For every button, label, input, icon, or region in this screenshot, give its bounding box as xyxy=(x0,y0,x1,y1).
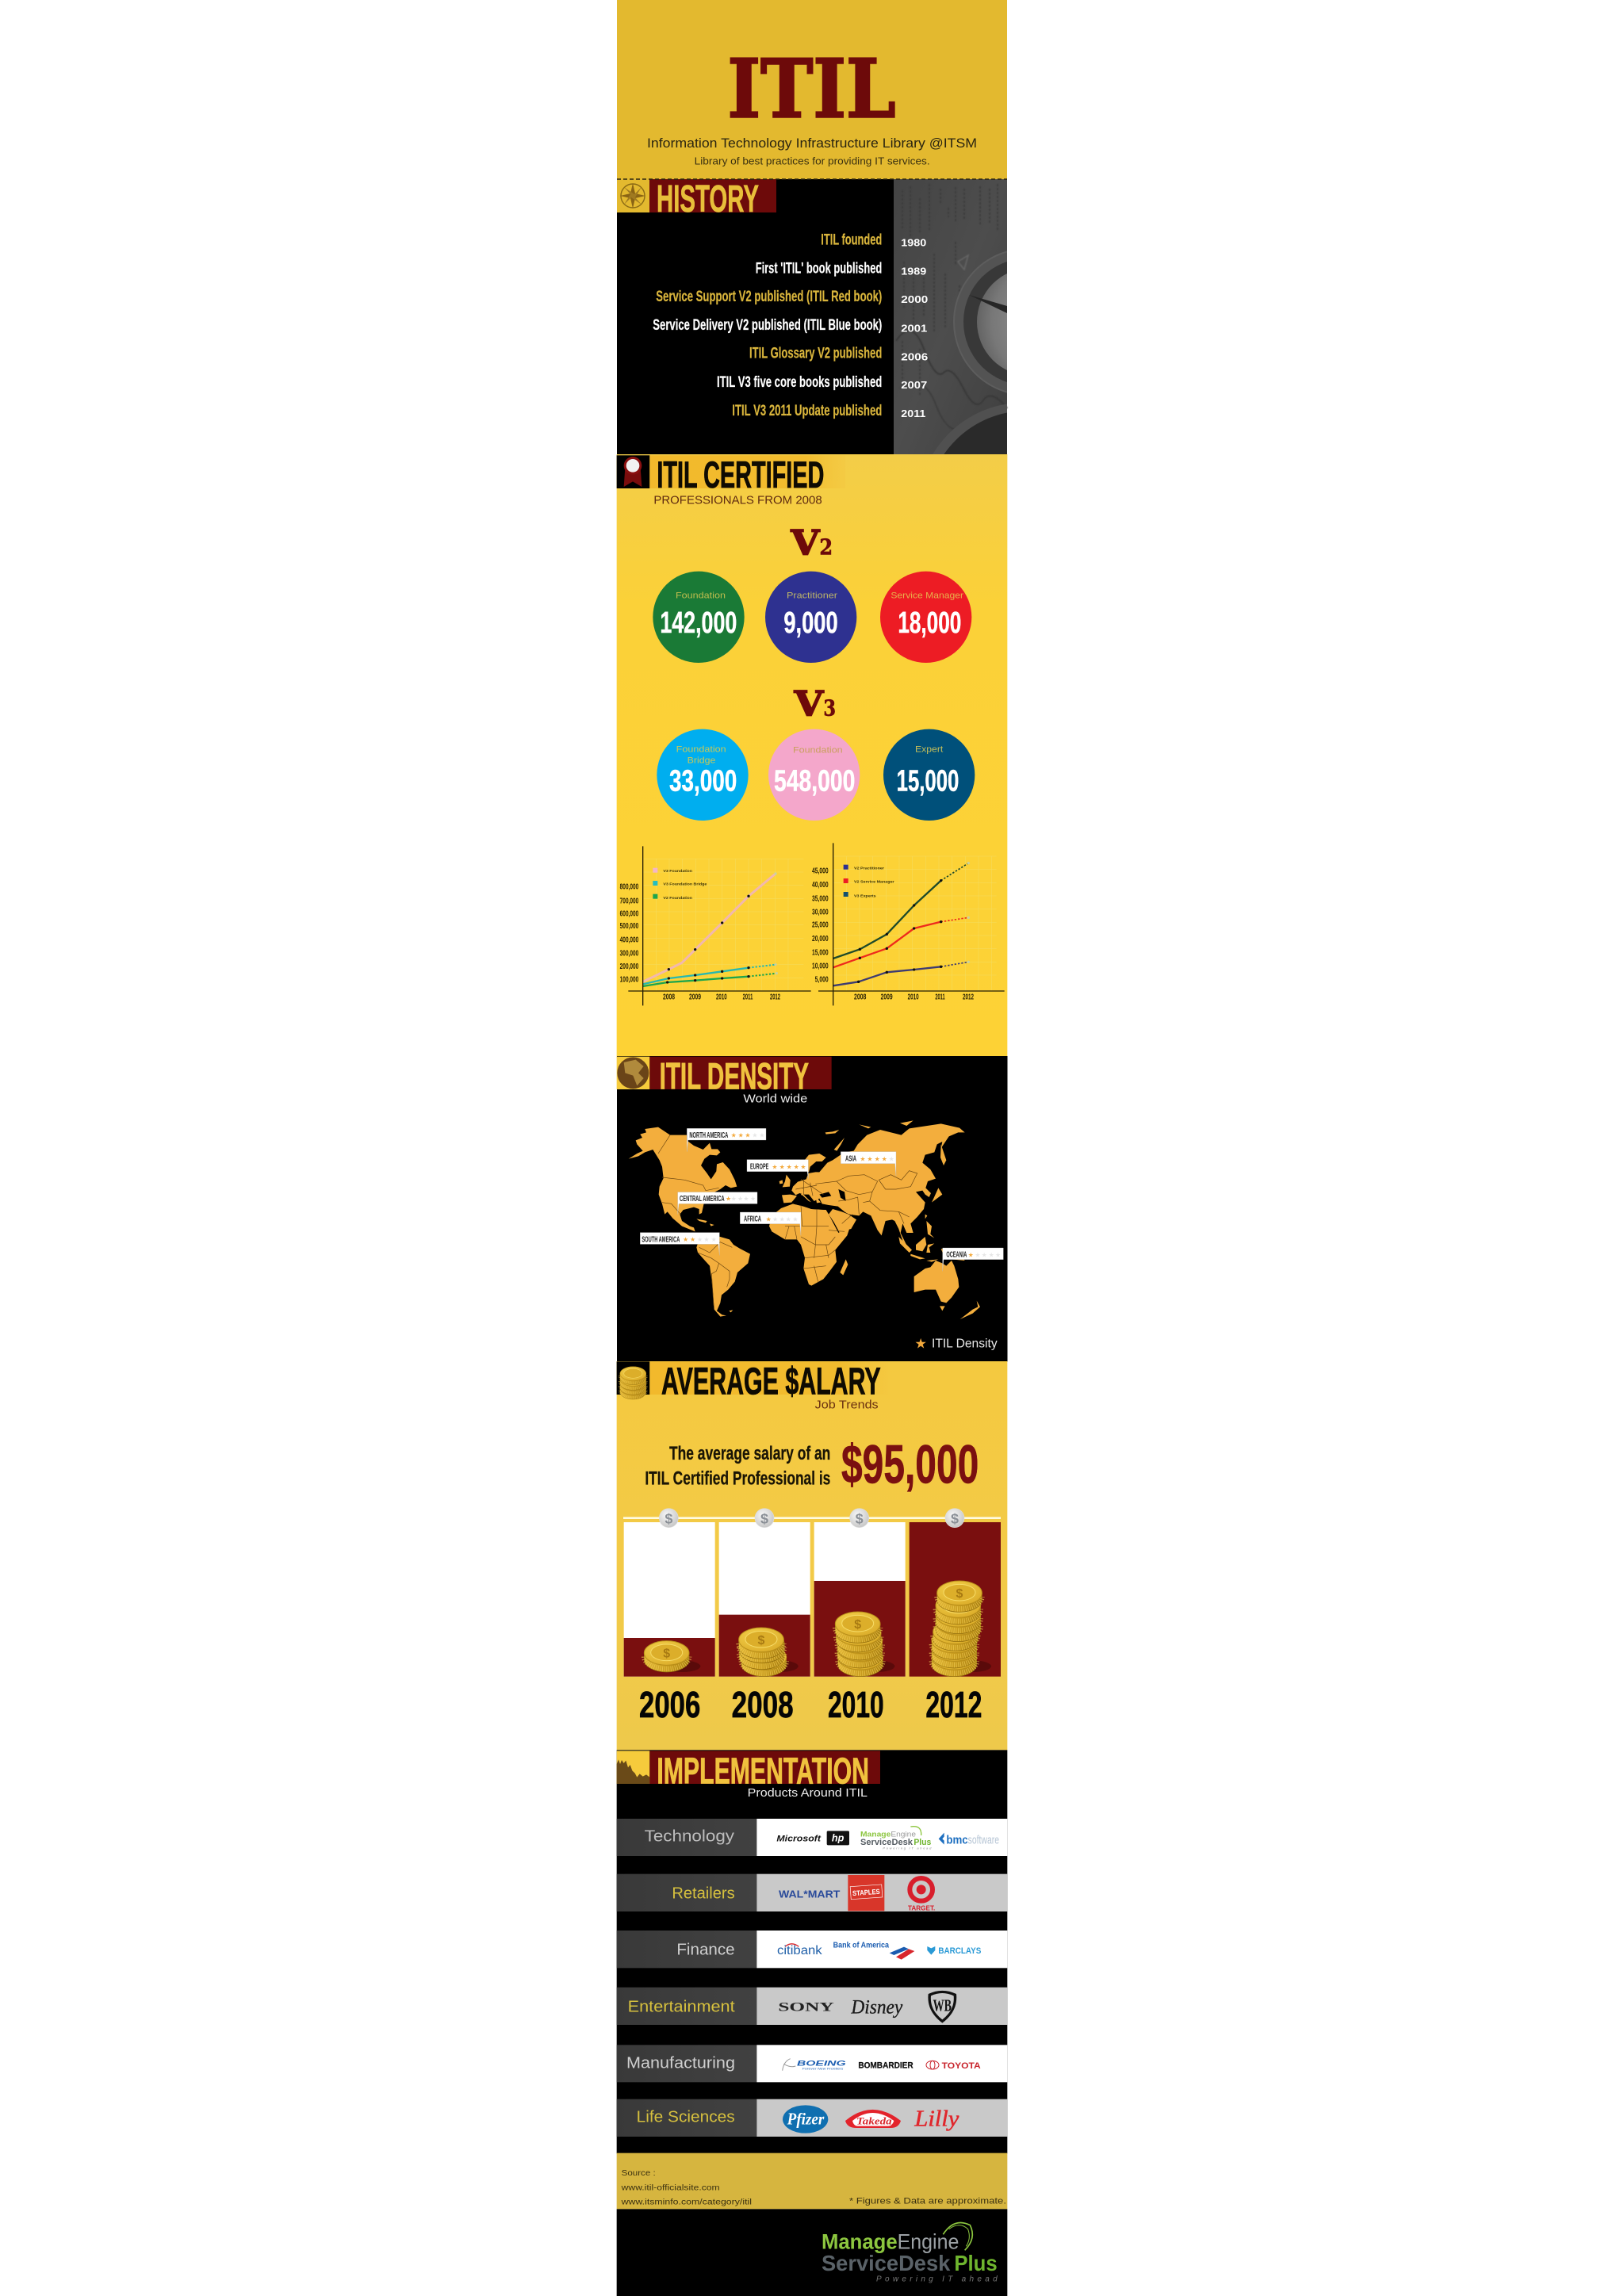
logo: Takeda xyxy=(845,2110,901,2128)
timeline events: Service Delivery V2 published (ITIL Blue book) xyxy=(653,316,882,334)
stat: V3 Foundation Bridge: Foundation xyxy=(676,745,726,755)
left chart y labels: 100,000 xyxy=(620,976,639,985)
row: Entertainment xyxy=(617,1988,1007,2025)
silver coin markers: $ xyxy=(760,1510,768,1526)
left chart y labels: 200,000 xyxy=(620,962,639,971)
logo: Boeing: Forever New Frontiers xyxy=(802,2067,843,2071)
section heading: salary xyxy=(649,1360,888,1402)
logo: BMC Software xyxy=(939,1833,999,1846)
logo: Pfizer: Pfizer xyxy=(787,2110,825,2128)
lower implementation rows xyxy=(617,2045,1007,2296)
salary statement xyxy=(645,1443,830,1490)
panel: average salary xyxy=(617,1360,1007,1750)
panel: ITIL certified xyxy=(617,453,1007,1058)
left chart y labels xyxy=(620,883,639,985)
row: Technology: Technology xyxy=(645,1827,735,1846)
callout: Oceania: OCEANIA xyxy=(946,1251,967,1260)
section heading: density xyxy=(649,1054,832,1096)
bar top rail xyxy=(623,1515,1001,1521)
right chart y labels: 45,000 xyxy=(812,867,829,876)
right chart x labels: 2011 xyxy=(935,993,945,1001)
callout: Asia: ★ xyxy=(875,1155,880,1162)
right chart y labels xyxy=(812,867,829,984)
row: Manufacturing xyxy=(617,2045,1007,2082)
callout: Africa: ★ xyxy=(766,1215,772,1223)
left chart x labels: 2010 xyxy=(716,993,727,1001)
V3 heading xyxy=(794,685,836,725)
timeline years xyxy=(901,236,928,419)
timeline events: ITIL V3 five core books published xyxy=(717,373,882,391)
row: Technology xyxy=(617,1819,1007,1856)
subheading: Job Trends xyxy=(815,1399,879,1412)
callout: Africa: ★ xyxy=(786,1215,791,1223)
right chart legend xyxy=(844,865,894,897)
callout: North America: NORTH AMERICA xyxy=(689,1131,728,1140)
ManageEngine ServiceDesk Plus logo: Manage xyxy=(822,2230,898,2254)
callout: Africa: ★ xyxy=(772,1215,778,1223)
ManageEngine ServiceDesk Plus logo xyxy=(822,2223,998,2283)
logo: Pfizer xyxy=(783,2105,828,2133)
row: Finance xyxy=(617,1931,1007,1968)
logo: Target xyxy=(908,1878,935,1911)
callout: Central America: ★ xyxy=(726,1196,731,1203)
left chart x labels: 2012 xyxy=(770,993,780,1001)
section heading: certified: ITIL CERTIFIED xyxy=(657,453,824,496)
section icon: ribbon xyxy=(617,455,649,488)
section heading: certified xyxy=(649,453,845,496)
callout: Central America: ★ xyxy=(737,1196,743,1203)
row: Retailers xyxy=(617,1874,1007,1911)
bar: 2010 xyxy=(814,1522,906,1677)
logo: Warner Bros xyxy=(928,1991,956,2023)
right chart y labels: 15,000 xyxy=(812,948,829,957)
right chart legend: V2 Practitioner xyxy=(854,867,884,871)
logo: Target: TARGET. xyxy=(908,1904,935,1911)
header panel xyxy=(617,0,1007,179)
callout: North America: ★ xyxy=(752,1132,758,1139)
left chart y labels: 500,000 xyxy=(620,922,639,931)
row: Manufacturing: Manufacturing xyxy=(626,2053,735,2072)
callout: Europe: ★ xyxy=(794,1163,799,1170)
left chart x labels: 2008 xyxy=(663,993,675,1001)
logo: Bank of America: Bank of America xyxy=(833,1942,889,1950)
stat: V3 Foundation: Foundation xyxy=(793,745,843,755)
callout: South America: ★ xyxy=(703,1236,710,1243)
line chart: foundation certifications xyxy=(620,846,811,1005)
callout: Central America: CENTRAL AMERICA xyxy=(680,1195,725,1203)
right chart axes xyxy=(818,843,1005,1005)
year labels: 2012 xyxy=(925,1684,982,1725)
right chart legend: V2 Service Manager xyxy=(854,880,894,884)
callout: Asia: ★ xyxy=(882,1155,887,1162)
timeline years: 1980 xyxy=(901,236,926,249)
logo: Walmart: WAL*MART xyxy=(779,1888,840,1900)
left chart y labels: 400,000 xyxy=(620,936,639,944)
left chart y labels: 300,000 xyxy=(620,949,639,958)
stat: V2 Service Manager xyxy=(880,572,971,663)
callout: Europe: ★ xyxy=(779,1163,785,1170)
bar: 2010: $ xyxy=(854,1618,861,1632)
callout: Oceania: ★ xyxy=(989,1251,994,1258)
timeline years: 2007 xyxy=(901,379,927,391)
world map: Americas xyxy=(629,1127,750,1317)
stat: V3 Expert: Expert xyxy=(915,745,944,755)
logo: Bank of America xyxy=(833,1942,914,1960)
timeline years: 2000 xyxy=(901,293,928,305)
callout: South America: ★ xyxy=(711,1236,717,1243)
left chart y labels: 600,000 xyxy=(620,909,639,918)
callout: North America: ★ xyxy=(745,1132,751,1139)
logo: ServiceDesk Plus: Manage xyxy=(860,1831,891,1839)
callout: Europe: ★ xyxy=(772,1163,778,1170)
row: Life Sciences xyxy=(617,2099,1007,2137)
callout: Oceania: ★ xyxy=(982,1251,987,1258)
stat: V3 Foundation Bridge xyxy=(657,729,749,821)
timeline years: 1989 xyxy=(901,265,926,277)
stat: V2 Practitioner: 9,000 xyxy=(783,607,838,640)
subheading: PROFESSIONALS FROM 2008 xyxy=(653,494,822,507)
section icon: globe xyxy=(617,1057,649,1089)
right chart y labels: 40,000 xyxy=(812,881,829,890)
panel: history xyxy=(617,178,1009,454)
panel: ITIL density background xyxy=(617,1056,1007,1362)
bar: 2008 xyxy=(719,1522,810,1677)
right chart x labels: 2009 xyxy=(881,993,893,1001)
logo: ServiceDesk Plus: Engine xyxy=(891,1831,916,1839)
silver coin markers: $ xyxy=(665,1510,672,1526)
right chart lines xyxy=(833,863,968,985)
sources xyxy=(620,2169,752,2207)
year labels: 2006 xyxy=(639,1684,700,1725)
panel: implementation xyxy=(617,1750,1007,2153)
callout: Oceania: ★ xyxy=(975,1251,981,1258)
right chart points xyxy=(857,862,970,983)
logo: Sony: SONY xyxy=(778,2001,834,2015)
callout: Africa: ★ xyxy=(779,1215,785,1223)
timeline events: Service Support V2 published (ITIL Red book) xyxy=(656,288,882,305)
V2 heading xyxy=(790,523,833,563)
right chart y labels: 25,000 xyxy=(812,921,829,930)
V3 heading: V xyxy=(794,685,824,725)
ManageEngine ServiceDesk Plus logo: ServiceDesk xyxy=(822,2251,951,2275)
section icon: compass xyxy=(617,179,649,212)
timeline events: ITIL V3 2011 Update published xyxy=(732,402,882,419)
callout: Asia xyxy=(841,1152,896,1176)
logo: Lilly: Lilly xyxy=(914,2107,959,2132)
callout: Asia: ★ xyxy=(867,1155,873,1162)
stat: V2 Service Manager: 18,000 xyxy=(898,607,961,640)
logo: ServiceDesk Plus: ServiceDesk xyxy=(860,1838,914,1847)
section heading: implementation xyxy=(649,1750,880,1791)
stat: V2 Practitioner: Practitioner xyxy=(787,591,837,600)
stat: V3 Foundation: 548,000 xyxy=(774,764,855,798)
silver coin markers xyxy=(659,1509,964,1528)
subtitle: Information Technology Infrastructure Library @ITSM xyxy=(647,136,977,151)
year labels: 2008 xyxy=(732,1684,794,1725)
world map: Eurasia, Africa and Oceania xyxy=(769,1120,980,1319)
logo: Staples xyxy=(848,1875,884,1911)
callout: Asia: ★ xyxy=(860,1155,866,1162)
salary statement: The average salary of an xyxy=(669,1443,830,1464)
V2 heading: 2 xyxy=(819,534,833,560)
year labels xyxy=(639,1684,982,1725)
stat: V2 Foundation xyxy=(653,572,745,663)
callout: Oceania: ★ xyxy=(968,1251,974,1258)
section icon: coins xyxy=(617,1361,649,1399)
stat: V2 Practitioner xyxy=(765,572,856,663)
right chart x labels: 2012 xyxy=(963,993,974,1001)
sources: www.itil-officialsite.com xyxy=(620,2183,720,2192)
line chart: practitioner, manager and expert certifications xyxy=(812,843,1005,1005)
callout: Europe: ★ xyxy=(787,1163,792,1170)
left chart legend: V3 Foundation Bridge xyxy=(663,882,707,886)
disclaimer: * Figures & Data are approximate. xyxy=(849,2196,1006,2206)
left chart x labels: 2009 xyxy=(689,993,701,1001)
subheading: World wide xyxy=(743,1093,807,1106)
callout: Asia: ★ xyxy=(889,1155,894,1162)
logo: BMC Software: bmc xyxy=(946,1834,968,1846)
callout: Oceania xyxy=(943,1248,1003,1271)
callout: Central America: ★ xyxy=(731,1196,737,1203)
left chart y labels: 800,000 xyxy=(620,883,639,892)
ManageEngine ServiceDesk Plus logo: Powering IT ahead xyxy=(876,2275,998,2283)
stat: V3 Expert: 15,000 xyxy=(897,764,959,798)
section heading: density: ITIL DENSITY xyxy=(660,1054,809,1096)
subheading: Products Around ITIL xyxy=(748,1787,868,1800)
right chart y labels: 35,000 xyxy=(812,895,829,904)
logo: ServiceDesk Plus xyxy=(860,1827,932,1850)
logo: Disney: Disney xyxy=(850,1996,903,2018)
left chart points xyxy=(666,872,778,984)
stat: V3 Expert xyxy=(883,729,975,821)
section icon: skyline xyxy=(617,1751,649,1784)
logo: HP xyxy=(827,1831,849,1845)
stat: V3 Foundation Bridge: 33,000 xyxy=(669,764,737,798)
callout: South America: SOUTH AMERICA xyxy=(642,1235,680,1244)
callout: Africa: AFRICA xyxy=(744,1215,761,1224)
sources: Source : xyxy=(622,2169,656,2178)
silver coin markers: $ xyxy=(856,1510,864,1526)
map legend xyxy=(914,1336,998,1352)
footer sources panel xyxy=(617,2153,1007,2209)
logo: Bombardier: BOMBARDIER xyxy=(858,2061,914,2071)
timeline events: ITIL founded xyxy=(821,232,882,249)
left chart axes xyxy=(628,846,811,1005)
logo: HP: hp xyxy=(832,1833,845,1844)
right chart y labels: 10,000 xyxy=(812,962,829,970)
callout: Central America xyxy=(678,1192,757,1215)
logo: Barclays: BARCLAYS xyxy=(938,1946,981,1956)
logo: Microsoft: Microsoft xyxy=(776,1835,822,1844)
bar: 2006 xyxy=(624,1522,715,1677)
callout: Europe: EUROPE xyxy=(750,1163,769,1172)
right chart legend: V3 Experts xyxy=(854,894,876,897)
logo: Boeing xyxy=(783,2059,846,2071)
V2 heading: V xyxy=(790,523,820,563)
callout: South America: ★ xyxy=(697,1236,703,1243)
section heading: history xyxy=(649,178,776,220)
logo: Toyota: TOYOTA xyxy=(942,2061,981,2071)
logo: Warner Bros: WB xyxy=(933,1998,952,2015)
row: Entertainment: Entertainment xyxy=(628,1997,735,2015)
section heading: salary: AVERAGE $ALARY xyxy=(661,1360,881,1402)
country borders xyxy=(785,1171,917,1282)
left chart legend: V2 Foundation xyxy=(663,896,692,900)
row: Retailers: Retailers xyxy=(672,1884,735,1902)
V3 heading: 3 xyxy=(823,696,836,721)
logo: ServiceDesk Plus: Plus xyxy=(914,1838,931,1847)
logo: Citibank: citibank xyxy=(777,1944,822,1957)
timeline events: First 'ITIL' book published xyxy=(756,259,882,277)
callout: Europe xyxy=(747,1160,808,1179)
right chart y labels: 20,000 xyxy=(812,935,829,943)
bar: 2006: $ xyxy=(663,1647,670,1661)
timeline years: 2006 xyxy=(901,350,928,362)
right chart x labels: 2010 xyxy=(908,993,919,1001)
logo: ServiceDesk Plus: Powering IT ahead xyxy=(883,1846,932,1850)
stat: V3 Foundation Bridge: Bridge xyxy=(688,756,715,766)
callout: North America: ★ xyxy=(738,1132,744,1139)
stat: V3 Foundation xyxy=(768,729,860,821)
map legend: ★ xyxy=(914,1336,927,1352)
left chart x labels: 2011 xyxy=(743,993,753,1001)
title: ITIL xyxy=(728,41,896,136)
callout: Africa xyxy=(740,1212,801,1235)
ManageEngine ServiceDesk Plus logo: Plus xyxy=(954,2251,998,2275)
left chart y labels: 700,000 xyxy=(620,897,639,905)
left chart lines xyxy=(643,874,776,986)
stat: V2 Foundation: 142,000 xyxy=(660,607,737,640)
callout: South America xyxy=(640,1233,719,1255)
bar: 2012: $ xyxy=(956,1587,963,1601)
right chart y labels: 5,000 xyxy=(815,975,829,984)
left chart x labels xyxy=(663,993,780,1001)
section heading: implementation: IMPLEMENTATION xyxy=(657,1750,869,1791)
tagline: Library of best practices for providing IT services. xyxy=(695,155,930,166)
timeline years: 2001 xyxy=(901,323,927,335)
callout: Africa: ★ xyxy=(792,1215,799,1223)
map callouts and heading xyxy=(617,1054,1003,1352)
bar: 2012 xyxy=(910,1522,1001,1677)
year labels: 2010 xyxy=(828,1684,884,1725)
logo: BMC Software: software xyxy=(968,1834,999,1846)
right chart x labels xyxy=(854,993,974,1001)
callout: Central America: ★ xyxy=(750,1196,756,1203)
footer brand panel xyxy=(617,2209,1007,2296)
callout: Asia: ASIA xyxy=(845,1155,856,1164)
callout: Europe: ★ xyxy=(800,1163,806,1170)
logo: Staples: STAPLES xyxy=(852,1888,880,1897)
callout: North America xyxy=(687,1128,766,1152)
stat: V2 Foundation: Foundation xyxy=(676,591,726,600)
callout: Oceania: ★ xyxy=(995,1251,1001,1258)
callout: Central America: ★ xyxy=(743,1196,749,1203)
callout: North America: ★ xyxy=(759,1132,765,1139)
inland seas xyxy=(791,1161,851,1215)
callout: North America: ★ xyxy=(731,1132,737,1139)
right chart x labels: 2008 xyxy=(854,993,867,1001)
map legend: ITIL Density xyxy=(932,1337,998,1350)
silver coin markers: $ xyxy=(951,1510,959,1526)
callout: South America: ★ xyxy=(683,1236,688,1243)
salary figure: $95,000 xyxy=(841,1435,979,1495)
left chart legend xyxy=(653,868,707,900)
stat: V2 Service Manager: Service Manager xyxy=(891,591,963,600)
row: Life Sciences: Life Sciences xyxy=(637,2108,735,2126)
logo: Takeda: Takeda xyxy=(856,2115,892,2126)
left chart legend: V3 Foundation xyxy=(663,869,692,873)
row: Finance: Finance xyxy=(676,1940,735,1958)
ManageEngine ServiceDesk Plus logo: Engine xyxy=(898,2230,959,2254)
timeline events xyxy=(653,232,882,419)
logo: Boeing: BOEING xyxy=(797,2059,846,2067)
timeline events: ITIL Glossary V2 published xyxy=(749,345,882,362)
logo: Toyota xyxy=(926,2061,981,2071)
history background photo xyxy=(894,179,1009,454)
bar: 2008: $ xyxy=(758,1634,765,1647)
callout: South America: ★ xyxy=(690,1236,695,1243)
section heading: history: HISTORY xyxy=(657,178,759,220)
sources: www.itsminfo.com/category/itil xyxy=(620,2198,752,2207)
salary statement: ITIL Certified Professional is xyxy=(645,1468,830,1490)
timeline years: 2011 xyxy=(901,408,925,419)
right chart y labels: 30,000 xyxy=(812,909,829,917)
